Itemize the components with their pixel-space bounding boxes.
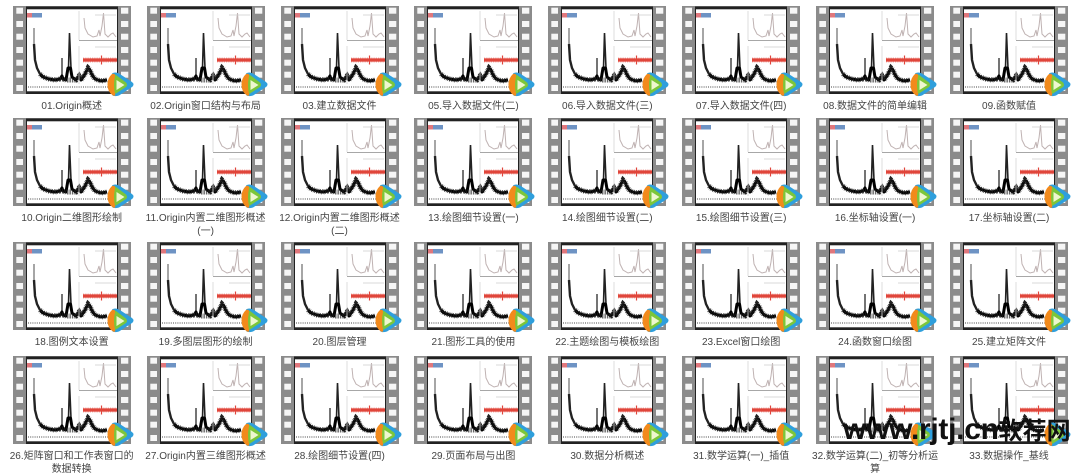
video 11: 11.Origin内置二维图形概述 [146,213,266,224]
watermark: www.rjtj.cn软荐网 [843,413,1071,446]
video 06 [548,6,668,112]
video 27: 27.Origin内置三维图形概述 [145,450,266,462]
video 07 [682,6,802,112]
video 26: 26.矩阵窗口和工作表窗口的 [10,450,134,462]
video 21 [414,242,534,348]
video 05: 05.导入数据文件(二) [428,100,519,112]
video 14: 14.绘图细节设置(二) [562,213,653,224]
video 22 [548,242,668,348]
video 33: 33.数据操作_基线 [969,450,1049,462]
video 07: 07.导入数据文件(四) [696,100,786,112]
video 08: 08.数据文件的简单编辑 [823,100,927,112]
video 31 [682,356,802,462]
video 32: 32.数学运算(二)_初等分析运 [812,450,938,462]
video 31: 31.数学运算(一)_插值 [693,450,789,462]
video 03 [281,6,402,112]
video 26: 数据转换 [52,464,92,475]
video 12: (二) [331,226,348,237]
video 17 [950,118,1070,224]
video 33 [950,356,1070,462]
video 10 [13,118,134,224]
video 11 [146,118,268,237]
video 30 [548,356,668,462]
video 15: 15.绘图细节设置(三) [696,213,786,224]
video 21: 21.图形工具的使用 [431,336,515,348]
video 24 [816,242,936,348]
video 12: 12.Origin内置二维图形概述 [279,213,400,224]
video 29: 29.页面布局与出图 [431,450,515,462]
video 20: 20.图层管理 [313,336,366,348]
video 06: 06.导入数据文件(三) [562,100,653,112]
video 02 [147,6,268,112]
video 03: 03.建立数据文件 [303,100,376,112]
video 16: 16.坐标轴设置(一) [835,213,915,224]
video 25 [950,242,1070,348]
video 09 [950,6,1070,112]
video 29 [414,356,534,462]
video 18: 18.图例文本设置 [35,336,109,348]
video 10: 10.Origin二维图形绘制 [21,213,122,224]
video 08 [816,6,936,112]
video 25: 25.建立矩阵文件 [972,336,1046,348]
video 30: 30.数据分析概述 [570,450,644,462]
video 13: 13.绘图细节设置(一) [428,213,519,224]
video 26 [10,356,134,475]
video 11: (一) [197,226,214,237]
video 14 [548,118,668,224]
video 22: 22.主题绘图与模板绘图 [555,336,659,348]
video 16 [816,118,936,224]
video 20 [281,242,402,348]
video 23: 23.Excel窗口绘图 [702,336,780,348]
video 05 [414,6,534,112]
video 01: 01.Origin概述 [41,100,102,112]
video 12 [279,118,402,237]
video 28 [281,356,402,462]
video 27 [145,356,268,462]
video 24: 24.函数窗口绘图 [838,336,912,348]
video 23 [682,242,802,348]
video 28: 28.绘图细节设置(四) [294,450,385,462]
video 32: 算 [870,464,880,475]
video 13 [414,118,534,224]
video 15 [682,118,802,224]
video 19 [147,242,268,348]
video 01 [13,6,134,112]
video 09: 09.函数赋值 [982,100,1036,112]
video 02: 02.Origin窗口结构与布局 [150,100,261,112]
video 32 [812,356,938,475]
video 18 [13,242,134,348]
video 19: 19.多图层图形的绘制 [159,336,253,348]
video 17: 17.坐标轴设置(二) [969,213,1049,224]
